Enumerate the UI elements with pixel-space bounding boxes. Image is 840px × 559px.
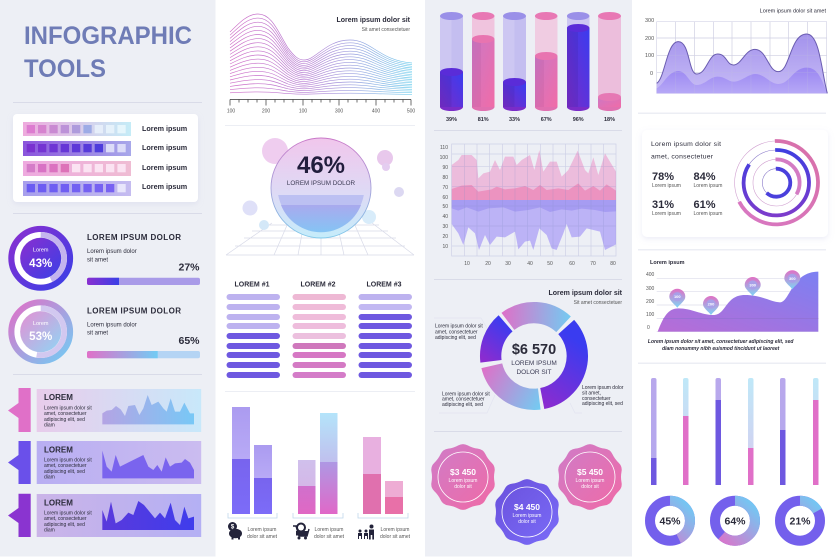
badge: $3 450: dolor sit	[454, 484, 472, 490]
bubbles	[242, 138, 404, 230]
badge: $4 450: dolor sit	[518, 519, 536, 525]
donut labels: amet, consectetuer	[442, 396, 485, 402]
table: lorem #1 bars: LOREM #1	[234, 282, 270, 288]
pin 200	[703, 296, 719, 315]
chart: mirrored area chart: 20	[442, 234, 448, 240]
chart: mirrored area chart: 100	[440, 155, 448, 161]
donut labels: Lorem ipsum dolor sit	[442, 392, 490, 398]
pin 300 right	[784, 270, 800, 289]
gauge: 46% glass circle: 46%	[297, 152, 345, 179]
row 2 squares	[23, 141, 187, 156]
stat: 65% progress	[87, 306, 200, 358]
stat: 65% progress: sit amet	[87, 330, 108, 336]
stat 78%: 78%	[652, 171, 674, 183]
badge: $5 450: Lorem ipsum	[576, 478, 604, 484]
chart: 3D cylinders	[440, 12, 621, 123]
badge: $3 450: $3 450	[450, 467, 476, 477]
stat 61%: 61%	[694, 199, 716, 211]
icon: piggy bank	[228, 522, 242, 540]
stat 78%: Lorem ipsum	[652, 183, 681, 189]
chart: mirrored area chart	[440, 144, 616, 267]
chart: mirrored area chart: 20	[485, 261, 491, 267]
stat: 65% progress: Lorem ipsum dolor	[87, 322, 137, 328]
panel: stats card with rings	[642, 130, 828, 237]
donut: 45%	[650, 501, 690, 541]
panel: lorem sparkline deep purple: Lorem ipsum dolor sit	[44, 510, 92, 516]
panel: lorem sparkline pink	[8, 388, 201, 432]
donut labels: Lorem ipsum dolor sit	[435, 324, 483, 330]
title: INFOGRAPHIC	[24, 22, 192, 50]
donut labels	[434, 318, 624, 413]
cylinder 39%	[440, 12, 463, 123]
table: lorem #3 bars	[358, 282, 412, 378]
chart: top right area curves: 100	[645, 53, 654, 59]
panel: lorem sparkline violet: amet, consectetuer	[44, 463, 87, 469]
bar chart captions: dolor sit amet	[380, 534, 411, 540]
stat 84%: 84%	[694, 171, 716, 183]
panel: lorem sparkline violet: diam	[44, 474, 55, 480]
wave chart axis: 500	[407, 108, 415, 114]
chart: mirrored area chart: 10	[464, 261, 470, 267]
panel: lorem sparkline pink: Lorem ipsum dolor sit	[44, 406, 92, 412]
chart: hill area with pins	[646, 260, 818, 332]
wave chart heading	[336, 17, 411, 33]
stat 78%	[652, 171, 681, 189]
bar chart captions: Lorem ipsum	[248, 527, 276, 533]
chart: hill area with pins: 400	[646, 272, 655, 278]
chart: hill area with pins: 300	[646, 286, 655, 292]
bar chart captions: dolor sit amet	[314, 534, 345, 540]
stat 31%: Lorem ipsum	[652, 211, 681, 217]
chart: top right area curves: 0	[650, 71, 653, 77]
badge: $3 450: Lorem ipsum	[449, 478, 477, 484]
cylinder 81%	[472, 12, 495, 123]
row 3 squares	[23, 161, 187, 176]
chart: top right area curves	[645, 8, 827, 93]
chart: hill area with pins: 100	[646, 312, 655, 318]
donut: 21%	[780, 501, 820, 541]
panel: lorem sparkline deep purple: amet, consectetuer	[44, 516, 87, 522]
gauge: 46% glass circle	[271, 138, 371, 238]
badge: $5 450	[558, 444, 622, 510]
panel: lorem sparkline violet: adipiscing elit, sed	[44, 469, 85, 475]
panel: lorem sparkline pink: amet, consectetuer	[44, 411, 87, 417]
icon: piggy bank: $	[231, 524, 235, 530]
stat 61%	[694, 199, 722, 217]
chart: mirrored area chart: 50	[547, 261, 553, 267]
panel: stats card with rings: amet, consectetuer	[651, 154, 714, 160]
stat: 27% progress	[87, 233, 200, 285]
wave chart axis	[227, 100, 415, 114]
cylinder 39%: 39%	[446, 117, 457, 123]
cylinder 18%	[598, 12, 621, 123]
panel: progress squares card	[13, 114, 198, 202]
table: lorem #2 bars	[292, 282, 346, 378]
wave chart axis: 400	[372, 108, 380, 114]
title: TOOLS	[24, 55, 106, 83]
title	[24, 22, 192, 83]
table: lorem #3 bars: LOREM #3	[366, 282, 402, 288]
stat: 65% progress: LOREM IPSUM DOLOR	[87, 306, 181, 315]
cylinder 67%: 67%	[541, 117, 552, 123]
panel: lorem sparkline pink: adipiscing elit, sed	[44, 417, 85, 423]
cylinder 33%: 33%	[509, 117, 520, 123]
chart: mirrored area chart: 60	[442, 195, 448, 201]
donut heading: Lorem ipsum dolor sit	[548, 290, 623, 297]
pin 200: 200	[708, 302, 715, 306]
badge: $5 450: $5 450	[577, 467, 603, 477]
chart: mirrored area chart: 110	[440, 145, 448, 151]
panel: lorem sparkline pink: LOREM	[44, 393, 73, 402]
donut: 64%: 64%	[724, 516, 746, 528]
bar chart captions: Lorem ipsum	[315, 527, 343, 533]
donut labels: sit amet,	[582, 390, 601, 396]
panel: lorem sparkline deep purple: diam	[44, 528, 55, 534]
chart: top right area curves: Lorem ipsum dolor sit amet	[760, 8, 826, 14]
stat 31%: 31%	[652, 199, 674, 211]
table: lorem #1 bars	[226, 282, 280, 378]
gauge: 53% ring: 53%	[29, 331, 52, 343]
wave chart axis: 200	[262, 108, 270, 114]
donut labels: adipiscing elit, sed	[442, 402, 483, 408]
pin 300	[745, 277, 761, 296]
cylinder 96%	[567, 12, 590, 123]
pin 100: 100	[674, 294, 681, 299]
cylinder 96%: 96%	[573, 117, 584, 123]
wave chart axis: 100	[227, 108, 235, 114]
row 4 squares: Lorem ipsum	[142, 182, 187, 191]
cylinder 81%: 81%	[478, 117, 489, 123]
donut: 45%: 45%	[659, 516, 681, 528]
wave chart heading: Lorem ipsum dolor sit	[336, 17, 411, 24]
panel: lorem sparkline violet: LOREM	[44, 446, 73, 454]
chart: mirrored area chart: 70	[590, 261, 596, 267]
floor grid	[226, 223, 414, 255]
chart: top right area curves: 300	[645, 18, 654, 24]
panel: lorem sparkline deep purple: adipiscing elit, sed	[44, 522, 85, 528]
row 1 squares	[23, 122, 187, 136]
badge: $3 450	[431, 444, 495, 510]
cylinder 67%	[535, 12, 558, 123]
badge: $4 450: Lorem ipsum	[513, 513, 541, 519]
gauge: 43% ring: Lorem	[33, 248, 49, 254]
chart: mirrored area chart: 40	[527, 261, 533, 267]
gauge: 53% ring	[12, 302, 70, 361]
panel: stats card with rings: Lorem ipsum dolor sit	[651, 141, 721, 148]
hill chart caption	[648, 339, 794, 352]
chart: segmented donut	[491, 313, 577, 399]
donut heading	[548, 290, 623, 306]
donut labels: Lorem ipsum dolor	[582, 385, 624, 391]
chart: segmented donut: LOREM IPSUM	[511, 360, 557, 367]
gauge: 43% ring	[12, 229, 70, 288]
pin 300: 300	[749, 282, 757, 288]
chart: hill area with pins: 0	[647, 325, 650, 331]
hill chart caption: diam nonummy nibh euismod tincidunt ut laoreet	[662, 346, 780, 352]
bar chart captions: dolor sit amet	[247, 534, 278, 540]
chart: hill area with pins: 200	[646, 299, 655, 305]
chart: top right area curves: 200	[645, 36, 654, 42]
stat 31%	[652, 199, 681, 217]
icon: shopping cart	[293, 522, 309, 540]
gauge: 46% glass circle: LOREM IPSUM DOLOR	[287, 180, 356, 187]
wave chart axis: 100	[299, 108, 307, 114]
pin 300 right: 300	[789, 276, 796, 281]
row 4 squares	[23, 181, 187, 196]
bar chart captions: Lorem ipsum	[381, 527, 409, 533]
chart: stacked wave lines	[230, 14, 412, 94]
panel: lorem sparkline deep purple: LOREM	[44, 498, 73, 508]
chart: mirrored area chart: 30	[442, 224, 448, 230]
table: lorem #2 bars: LOREM #2	[300, 282, 336, 288]
stat: 27% progress: LOREM IPSUM DOLOR	[87, 233, 181, 242]
wave chart axis: 300	[335, 108, 343, 114]
chart: segmented donut: $6 570	[512, 342, 556, 358]
chart: mirrored area chart: 60	[569, 261, 575, 267]
row 2 squares: Lorem ipsum	[142, 143, 187, 152]
stat: 27% progress: 27%	[178, 262, 200, 274]
row 1 squares: Lorem ipsum	[142, 124, 187, 133]
chart: mirrored area chart: 80	[610, 261, 616, 267]
panel: lorem sparkline violet: Lorem ipsum dolor sit	[44, 458, 92, 464]
stat 84%	[694, 171, 722, 189]
badge: $4 450	[495, 479, 559, 545]
badge: $5 450: dolor sit	[581, 484, 599, 490]
stat: 27% progress: sit amet	[87, 258, 108, 264]
chart: mirrored area chart: 50	[442, 204, 448, 210]
chart: mirrored area chart: 10	[442, 244, 448, 250]
chart: mirrored area chart: 70	[442, 185, 448, 191]
bar chart captions	[247, 527, 411, 540]
donut heading: Sit amet consectetuer	[574, 300, 622, 306]
chart: mirrored area chart: 40	[442, 214, 448, 220]
stat 84%: Lorem ipsum	[694, 183, 722, 189]
chart: mirrored area chart: 80	[442, 175, 448, 181]
chart: hill area with pins: Lorem ipsum	[650, 260, 685, 266]
badge: $4 450: $4 450	[514, 502, 540, 512]
panel: lorem sparkline pink: diam	[44, 422, 55, 428]
row 3 squares: Lorem ipsum	[142, 163, 187, 172]
donut labels: consectetuer	[582, 396, 611, 402]
stat 61%: Lorem ipsum	[694, 211, 722, 217]
pin 100	[669, 289, 685, 308]
concentric rings	[733, 140, 819, 226]
donut labels: adipiscing elit, sed	[582, 401, 623, 407]
donut labels: adipiscing elit, sed	[435, 335, 476, 341]
bar chart: stacked pairs	[228, 407, 408, 518]
gauge: 53% ring: Lorem	[33, 321, 49, 327]
wave chart heading: Sit amet consectetuer	[362, 27, 410, 33]
hill chart caption: Lorem ipsum dolor sit amet, consectetuer adipiscing elit, sed	[648, 339, 794, 345]
chart: vertical progress bars	[651, 378, 818, 485]
panel: lorem sparkline deep purple	[8, 494, 201, 537]
chart: mirrored area chart: 30	[505, 261, 511, 267]
donut: 21%: 21%	[789, 516, 811, 528]
cylinder 18%: 18%	[604, 117, 615, 123]
stat: 27% progress: Lorem ipsum dolor	[87, 249, 137, 255]
icon: people	[358, 524, 374, 540]
cylinder 33%	[503, 12, 526, 123]
donut: 64%	[715, 501, 755, 541]
panel: lorem sparkline violet	[8, 441, 201, 484]
stat: 65% progress: 65%	[178, 335, 200, 347]
chart: segmented donut: DOLOR SIT	[516, 369, 552, 376]
donut labels: amet, consectetuer	[435, 330, 478, 336]
chart: mirrored area chart: 90	[442, 165, 448, 171]
gauge: 43% ring: 43%	[29, 258, 52, 270]
